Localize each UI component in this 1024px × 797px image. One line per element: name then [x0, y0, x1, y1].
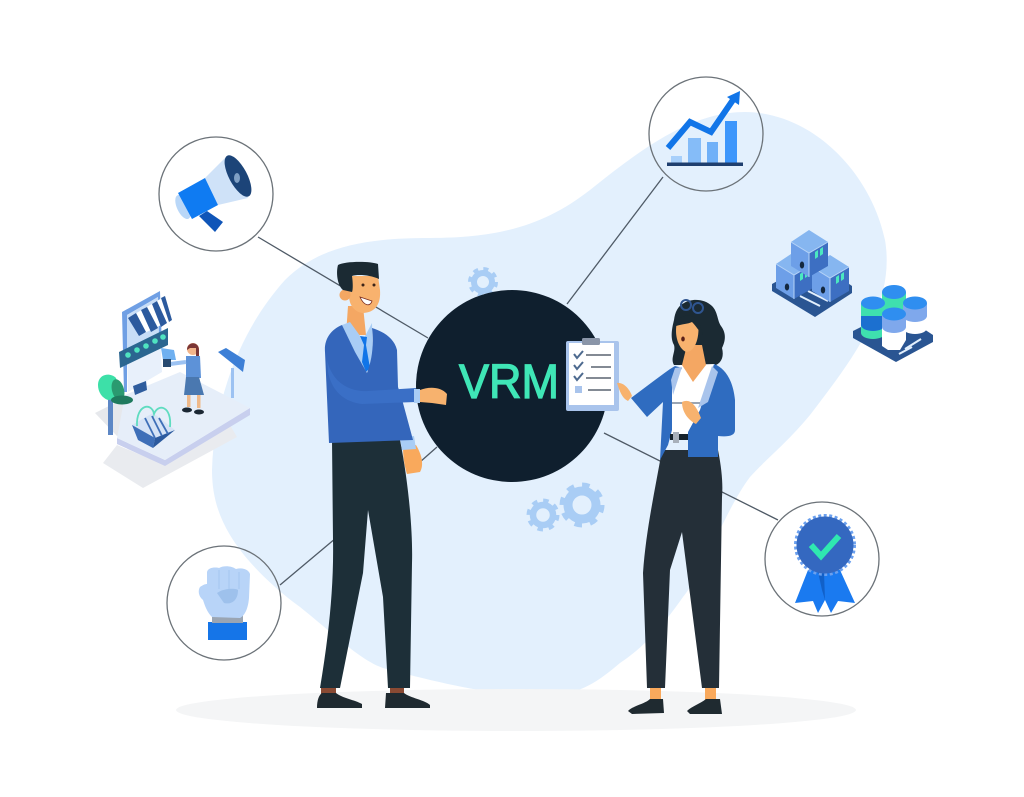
icon circle: growth chart — [649, 77, 763, 191]
woman shirt — [670, 364, 715, 434]
gears — [470, 269, 602, 530]
central VRM circle — [416, 290, 608, 482]
woman glasses — [681, 300, 703, 313]
woman neck — [682, 345, 706, 382]
connector lines — [258, 177, 778, 585]
man hand — [420, 388, 447, 405]
store left back shadow — [95, 398, 125, 436]
man eyes — [362, 284, 376, 286]
man trousers — [320, 440, 412, 688]
small screen — [133, 381, 147, 395]
man ankles — [321, 686, 404, 695]
box top — [791, 230, 828, 277]
awning — [128, 296, 172, 336]
icon circle: fist — [167, 546, 281, 660]
illustration: stacked boxes on pallet — [772, 230, 852, 317]
illustration: storefront — [95, 291, 250, 488]
woman face — [676, 319, 698, 352]
gear: large bottom — [562, 485, 602, 525]
woman jacket left — [631, 366, 682, 460]
store platform — [117, 372, 250, 466]
icon circle: megaphone — [159, 137, 273, 251]
man ear — [340, 290, 350, 300]
character: woman — [617, 300, 735, 714]
woman lapel left — [671, 367, 682, 395]
man cuff — [414, 389, 420, 403]
box right — [812, 255, 849, 302]
woman lapel right — [698, 366, 718, 408]
barrel right — [903, 296, 927, 334]
store facade — [122, 291, 162, 392]
man head — [349, 276, 380, 313]
woman pen — [672, 402, 700, 404]
gear: top — [470, 269, 496, 295]
woman fringe — [676, 316, 703, 335]
man hair — [337, 262, 379, 292]
woman shoes — [628, 699, 722, 714]
woman mouth — [681, 336, 685, 342]
rating sign — [119, 328, 168, 368]
clipboard — [566, 338, 619, 411]
woman jacket right — [688, 364, 735, 457]
VRM label: VRM — [459, 356, 559, 409]
mailbox — [98, 375, 133, 435]
character: man — [317, 262, 447, 708]
woman belt — [670, 432, 688, 443]
barrel left — [861, 296, 885, 339]
woman trousers — [643, 450, 722, 688]
ground shadow — [176, 689, 856, 731]
icon circle: award ribbon — [765, 502, 879, 616]
illustration: barrels on pallet — [853, 285, 933, 362]
man collar and shirt — [342, 322, 373, 370]
barrel pallet — [853, 310, 933, 362]
signpost — [218, 348, 245, 398]
background blob — [212, 112, 887, 695]
basket — [132, 407, 175, 448]
woman ankles — [650, 686, 716, 700]
man cuff back — [400, 436, 416, 450]
woman left hand — [617, 383, 632, 401]
man neck — [346, 306, 366, 335]
man jacket — [325, 325, 413, 443]
man smile — [360, 297, 372, 305]
gear: small bottom — [528, 500, 558, 530]
pallet — [772, 260, 852, 317]
box left — [776, 252, 813, 299]
shopper — [161, 343, 204, 414]
barrel front — [882, 308, 906, 350]
woman right hand — [682, 401, 701, 424]
barrel back — [882, 285, 906, 318]
man arm — [327, 360, 416, 404]
man tie — [360, 336, 370, 372]
woman hair — [672, 300, 725, 365]
man shoes — [317, 693, 430, 708]
store floor shadow — [103, 425, 237, 488]
man back hand — [403, 445, 422, 474]
